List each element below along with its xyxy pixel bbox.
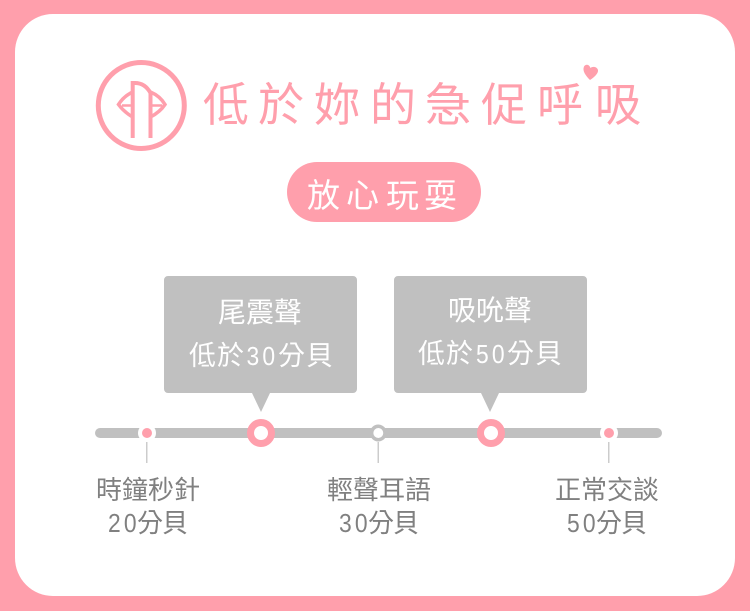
subtitle pill: 放心玩耍 <box>307 177 457 214</box>
callout: sucking sound: 50 <box>476 341 505 369</box>
label: normal conversation: 50 <box>567 510 596 538</box>
marker: 30 dB whisper <box>372 426 385 463</box>
label: clock second hand: 時鐘秒針 <box>96 475 200 505</box>
callout: sucking sound <box>394 276 587 412</box>
label: whisper: 輕聲耳語 <box>327 475 431 505</box>
callout: tail vibration sound: 低於 <box>189 341 244 371</box>
label: normal conversation <box>555 475 659 538</box>
title: 低於妳的急促呼吸 <box>203 79 641 131</box>
callout: tail vibration sound <box>164 276 357 412</box>
timeline bar <box>95 428 662 438</box>
subtitle pill <box>287 162 481 222</box>
marker: 50 dB <box>600 424 618 463</box>
marker: 20 dB <box>138 424 156 463</box>
label: whisper <box>327 475 431 538</box>
callout: tail vibration sound: 30 <box>246 343 275 371</box>
marker: 30 dB highlighted <box>250 422 272 444</box>
icon: circular logo <box>98 62 184 148</box>
label: whisper: 30 <box>339 510 368 538</box>
label: whisper: 分貝 <box>368 508 419 538</box>
label: clock second hand: 分貝 <box>137 508 188 538</box>
label: normal conversation: 分貝 <box>596 508 647 538</box>
callout: sucking sound: 低於 <box>418 339 473 369</box>
callout: sucking sound: 分貝 <box>507 339 562 369</box>
label: clock second hand: 20 <box>108 510 137 538</box>
callout: sucking sound: 吸吮聲 <box>448 295 532 326</box>
marker: 50 dB highlighted <box>480 422 502 444</box>
label: normal conversation: 正常交談 <box>555 475 659 505</box>
callout: tail vibration sound: 分貝 <box>278 341 333 371</box>
callout: tail vibration sound: 尾震聲 <box>218 297 302 328</box>
icon: heart <box>583 65 598 80</box>
label: clock second hand <box>96 475 200 538</box>
